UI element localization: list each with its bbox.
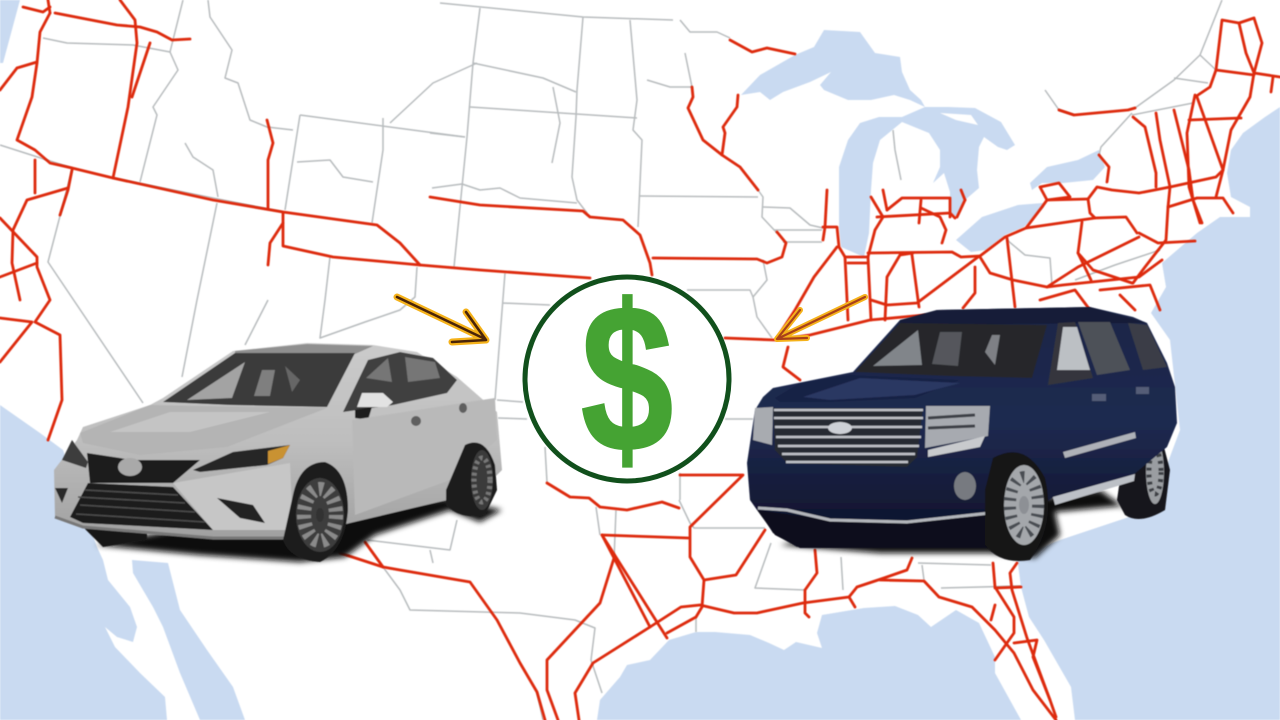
SUV rear wheel bbox=[1117, 430, 1170, 519]
sedan upper grille bbox=[87, 453, 200, 483]
arrow: right, pointing to dollar bbox=[777, 297, 865, 339]
dollar sign: $ bbox=[581, 261, 673, 496]
sedan lower grille bbox=[70, 483, 213, 530]
sedan front logo bbox=[118, 458, 142, 476]
SUV roof bbox=[900, 307, 1147, 325]
SUV front side window bbox=[1048, 322, 1093, 385]
SUV middle window bbox=[1078, 322, 1130, 375]
sedan ground shadow bbox=[95, 498, 502, 562]
SUV door trim bbox=[1063, 432, 1136, 458]
SUV underbody bbox=[757, 508, 843, 547]
SUV grille bbox=[773, 408, 923, 467]
SUV tow bar bbox=[758, 508, 990, 522]
SUV lower bumper shade bbox=[757, 510, 1000, 548]
sedan body bbox=[54, 343, 502, 538]
sedan rear wheel bbox=[446, 442, 497, 516]
SUV body bbox=[747, 307, 1177, 540]
car: silver sedan bbox=[54, 343, 502, 562]
SUV door handles bbox=[1092, 387, 1149, 401]
SUV right headlight bbox=[925, 406, 990, 448]
SUV front wheel bbox=[985, 452, 1048, 561]
SUV windshield bbox=[855, 323, 1047, 378]
sedan turn signal bbox=[268, 445, 290, 464]
sedan side windows bbox=[343, 352, 457, 412]
sedan bumper right bbox=[173, 463, 293, 530]
SUV running board bbox=[1053, 474, 1135, 505]
sedan roof bbox=[235, 344, 373, 354]
sedan hood bbox=[80, 405, 327, 455]
sedan fog vent bbox=[217, 498, 265, 523]
SUV left headlight bbox=[753, 407, 773, 445]
sedan right headlight bbox=[193, 445, 290, 472]
dollar badge bbox=[525, 261, 729, 496]
sedan door highlight bbox=[352, 398, 497, 515]
sedan left vent bbox=[55, 488, 68, 503]
SUV rear window bbox=[1128, 323, 1167, 370]
sedan door handles bbox=[411, 403, 467, 426]
sedan left headlight bbox=[62, 440, 88, 468]
sedan bumper lip bbox=[55, 517, 290, 538]
SUV fog lamp bbox=[954, 472, 976, 500]
sedan mirror bbox=[357, 393, 393, 407]
SUV ground shadow bbox=[780, 490, 1135, 558]
SUV hood bbox=[775, 375, 960, 402]
sedan windshield bbox=[163, 353, 355, 407]
sedan front wheel bbox=[283, 462, 348, 562]
SUV logo bbox=[828, 422, 852, 434]
car: navy SUV bbox=[747, 307, 1177, 561]
sedan underbody bbox=[83, 527, 147, 547]
arrow: left, pointing to dollar bbox=[397, 297, 486, 342]
